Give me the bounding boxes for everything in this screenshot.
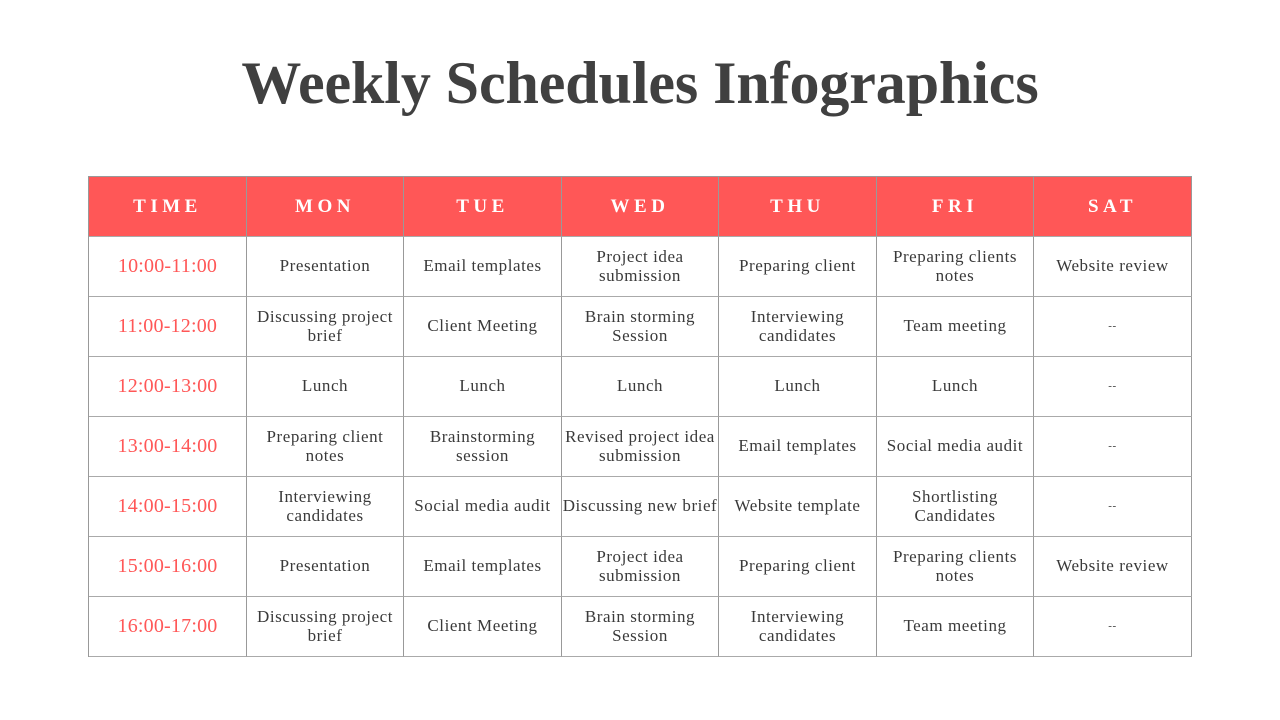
cell: Social media audit [887,436,1023,455]
cell [247,597,404,657]
cell: Interviewing [278,486,372,506]
cell [877,417,1034,477]
cell [877,537,1034,597]
cell [1034,477,1192,537]
time slot 11:00-12:00: 11:00-12:00 [118,315,217,337]
cell: notes [936,266,974,284]
time slot 11:00-12:00 [89,297,247,357]
cell [1034,237,1192,297]
header: monday [247,177,404,237]
cell: session [456,446,509,464]
time slot 15:00-16:00: 15:00-16:00 [118,555,217,577]
time slot 16:00-17:00: 16:00-17:00 [118,615,217,637]
cell [1034,417,1192,477]
cell: Discussing project [257,606,393,626]
cell: -- [1108,380,1117,392]
cell: Candidates [914,506,996,524]
header: friday [877,177,1034,237]
cell [1034,537,1192,597]
cell: Session [612,626,668,644]
cell [404,597,562,657]
header: saturday: SAT [1088,196,1137,217]
cell: Shortlisting [912,486,998,506]
cell: -- [1108,500,1117,512]
schedule table [88,176,1192,657]
cell [404,537,562,597]
header: time: TIME [133,196,202,217]
cell: Preparing clients [893,546,1017,566]
cell: Session [612,326,668,344]
cell [404,357,562,417]
cell [1034,297,1192,357]
cell: Website review [1056,556,1169,575]
header: saturday [1034,177,1192,237]
cell: Brainstorming [430,426,535,446]
cell: Email templates [423,556,542,575]
cell: notes [936,566,974,584]
cell: Lunch [774,376,821,395]
cell [877,237,1034,297]
cell [562,297,719,357]
cell: Interviewing [751,606,844,626]
cell: Social media audit [414,496,551,515]
cell: Discussing project [257,306,393,326]
cell: submission [599,446,681,464]
cell: Website template [735,496,860,515]
cell [562,537,719,597]
cell: Preparing client [739,256,856,275]
cell [877,477,1034,537]
time slot 14:00-15:00 [89,477,247,537]
cell [877,357,1034,417]
cell: brief [308,326,342,344]
cell: Project idea [596,246,684,266]
cell: Presentation [280,256,370,275]
cell [719,477,877,537]
cell: Lunch [617,376,663,395]
cell: Preparing clients [893,246,1017,266]
cell: brief [308,626,342,644]
cell [719,297,877,357]
cell: Lunch [932,376,978,395]
cell [719,237,877,297]
cell: Preparing client [267,426,383,446]
cell [562,477,719,537]
cell [562,357,719,417]
cell: -- [1108,320,1117,332]
cell [877,597,1034,657]
cell [404,417,562,477]
cell: submission [599,266,681,284]
time slot 16:00-17:00 [89,597,247,657]
cell [719,597,877,657]
title: Weekly Schedules Infographics [241,50,1039,116]
header: wednesday [562,177,719,237]
time slot 15:00-16:00 [89,537,247,597]
cell: Team meeting [903,316,1007,335]
cell [247,237,404,297]
time slot 13:00-14:00: 13:00-14:00 [118,435,217,457]
cell [719,417,877,477]
cell [404,297,562,357]
cell: Team meeting [903,616,1007,635]
cell [719,537,877,597]
cell [247,297,404,357]
cell: Preparing client [739,556,856,575]
cell: Interviewing [751,306,844,326]
time slot 10:00-11:00 [89,237,247,297]
cell [247,357,404,417]
cell: -- [1108,620,1117,632]
cell: Presentation [280,556,370,575]
cell [404,237,562,297]
cell [562,237,719,297]
cell: Client Meeting [427,616,538,635]
cell: Project idea [596,546,684,566]
header: tuesday [404,177,562,237]
time slot 12:00-13:00 [89,357,247,417]
cell: Revised project idea [565,426,715,446]
header: monday: MON [295,196,355,217]
header: wednesday: WED [611,196,669,217]
time slot 12:00-13:00: 12:00-13:00 [118,375,217,397]
cell: Brain storming [585,606,695,626]
cell [877,297,1034,357]
cell: candidates [286,506,364,524]
time slot 13:00-14:00 [89,417,247,477]
cell: Email templates [423,256,542,275]
time slot 10:00-11:00: 10:00-11:00 [118,255,217,277]
cell [1034,597,1192,657]
cell: submission [599,566,681,584]
cell: Website review [1056,256,1169,275]
cell [1034,357,1192,417]
header: thursday: THU [770,196,825,217]
cell: Lunch [459,376,506,395]
cell: Discussing new brief [563,496,717,515]
cell: Brain storming [585,306,695,326]
time slot 14:00-15:00: 14:00-15:00 [118,495,217,517]
cell: Client Meeting [427,316,538,335]
cell [247,477,404,537]
cell [562,417,719,477]
cell [247,417,404,477]
cell [719,357,877,417]
cell [247,537,404,597]
cell: candidates [759,626,836,644]
header: friday: FRI [932,196,978,217]
cell: notes [306,446,344,464]
cell [562,597,719,657]
cell: candidates [759,326,836,344]
cell [404,477,562,537]
cell: Email templates [738,436,857,455]
cell: -- [1108,440,1117,452]
cell: Lunch [302,376,348,395]
header: time [89,177,247,237]
header: thursday [719,177,877,237]
header: tuesday: TUE [456,196,509,217]
